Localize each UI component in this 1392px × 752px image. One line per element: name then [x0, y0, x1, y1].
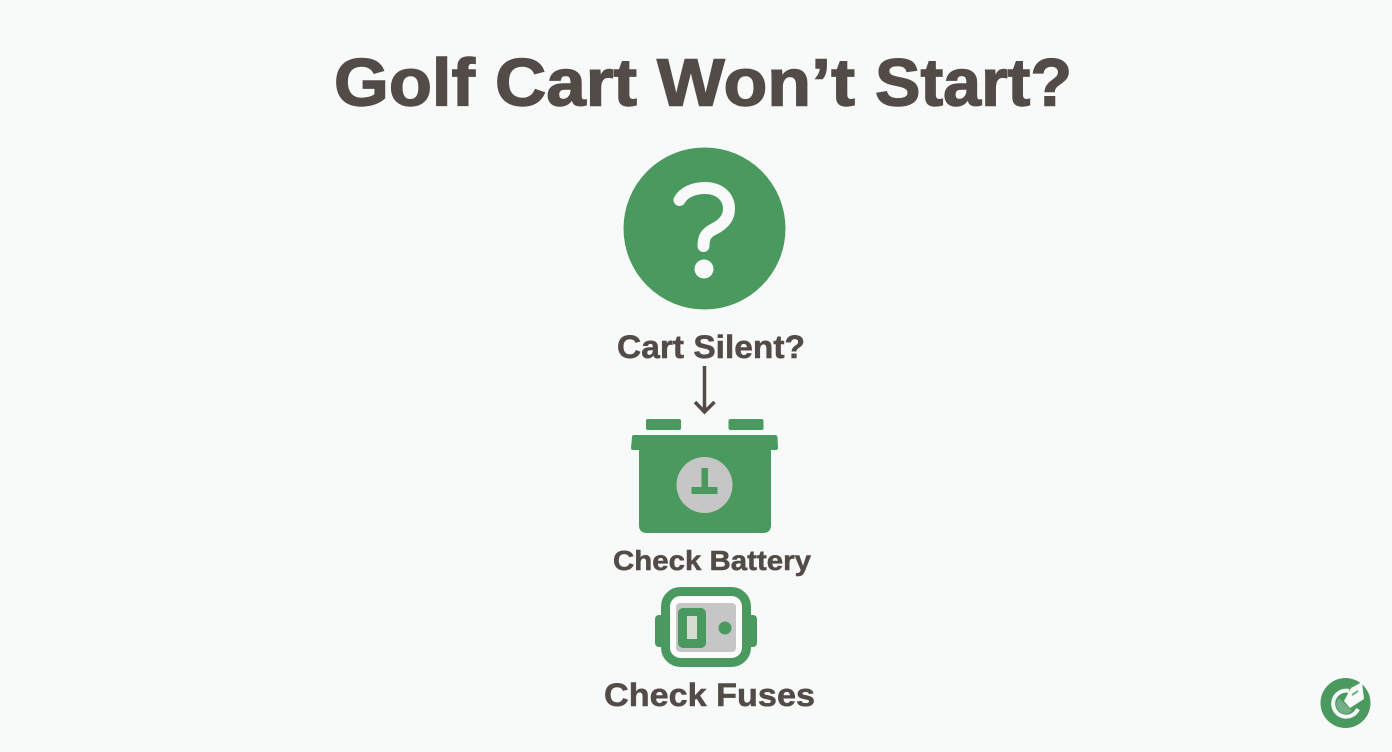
title: Won’t — [657, 46, 855, 120]
title — [334, 46, 1072, 120]
title: Cart — [495, 46, 637, 120]
title: Golf — [334, 46, 476, 120]
icon: fuse — [655, 592, 757, 662]
label: check fuses: Check Fuses — [604, 677, 815, 713]
label: check battery: Check Battery — [613, 545, 811, 576]
icon: battery — [631, 419, 778, 533]
arrow: down — [695, 366, 714, 412]
title: Start? — [875, 46, 1072, 120]
label: cart silent: Cart Silent? — [617, 329, 805, 365]
icon: question mark circle — [624, 148, 786, 310]
icon: logo — [1320, 678, 1370, 728]
